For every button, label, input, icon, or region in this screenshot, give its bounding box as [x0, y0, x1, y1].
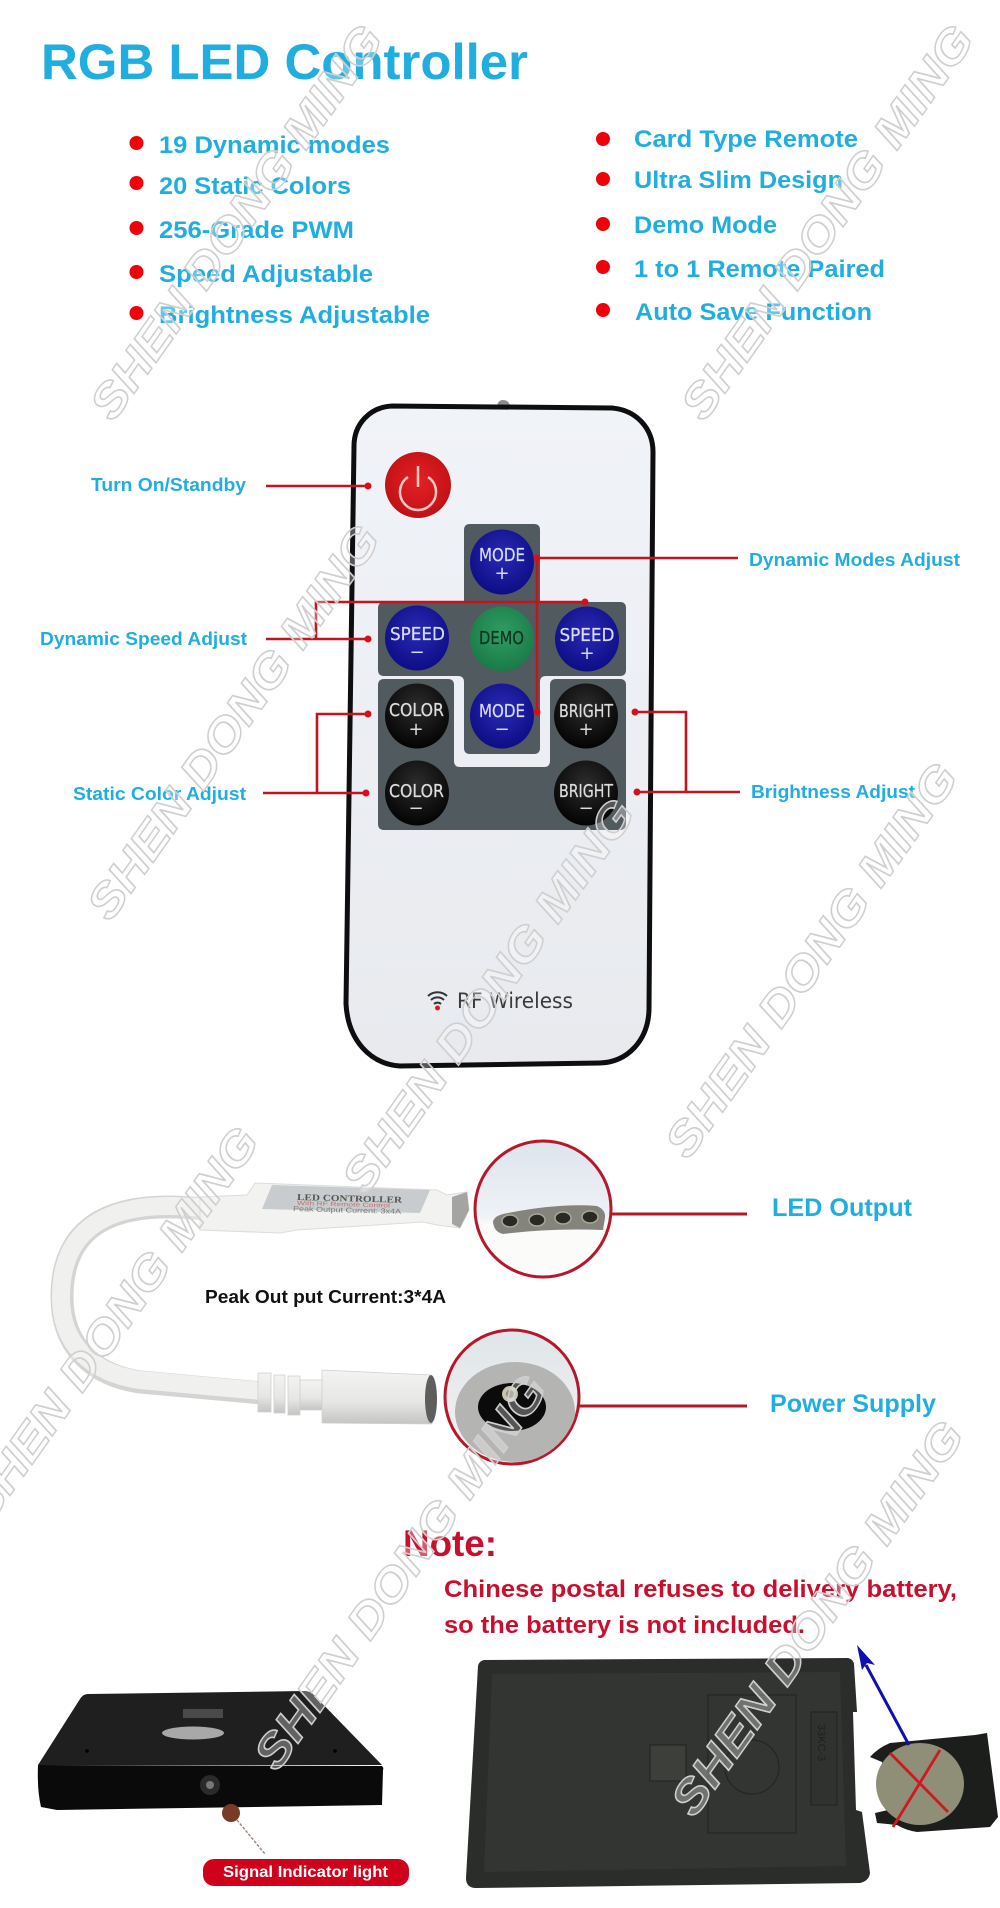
button: DEMO: [470, 606, 534, 672]
button: MODE -: MODE: [479, 701, 525, 722]
button: COLOR +: [385, 684, 449, 748]
peak current note: Peak Out put Current:3*4A: [205, 1287, 446, 1307]
indicator LED: [200, 1775, 220, 1795]
button: MODE +: MODE: [479, 545, 525, 566]
red cross: [890, 1750, 948, 1827]
callout: Static Color Adjust: Static Color Adjust: [73, 784, 246, 804]
bullet: 19 Dynamic modes: 19 Dynamic modes: [159, 132, 390, 159]
button: SPEED -: [385, 606, 449, 670]
pointer line: [237, 1820, 265, 1854]
feature list: left column: [130, 132, 430, 329]
button: BRIGHT -: [554, 760, 618, 826]
note text: Chinese postal refuses to delivery battery,: [444, 1576, 957, 1603]
feature list: right column: [596, 126, 885, 326]
module label: LED CONTROLLER: [297, 1192, 403, 1205]
callout: Dynamic Speed Adjust: [40, 598, 588, 649]
watermark: SHEN DONG MING: [660, 1411, 974, 1825]
button: BRIGHT +: [554, 684, 618, 748]
keypad: lower U: [378, 679, 626, 830]
watermark: SHEN DONG MING: [670, 15, 984, 429]
callout: LED Output: LED Output: [772, 1194, 913, 1222]
button: COLOR +: +: [408, 719, 424, 740]
zoom circle: power jack: [445, 1330, 579, 1464]
bullet: Auto Save Function: Auto Save Function: [635, 299, 872, 326]
note text: so the battery is not included.: [444, 1612, 805, 1639]
battery: [876, 1743, 964, 1825]
RF Wireless text: RF Wireless: [457, 989, 573, 1013]
callout: Turn On/Standby: [91, 475, 372, 495]
keypad: upper cross: [378, 524, 626, 754]
connector tip: [452, 1192, 469, 1228]
bullet: Brightness Adjustable: Brightness Adjustable: [159, 302, 430, 329]
button: BRIGHT -: −: [578, 798, 594, 819]
callout: Brightness Adjust: Brightness Adjust: [751, 782, 915, 802]
bullet: Speed Adjustable: Speed Adjustable: [159, 261, 373, 288]
blue arrow: [857, 1645, 909, 1745]
DC jack opening: [425, 1375, 437, 1423]
slot: [183, 1709, 223, 1718]
bullet: 256-Grade PWM: 256-Grade PWM: [159, 217, 354, 244]
button: MODE +: +: [494, 563, 510, 584]
bullet: 1 to 1 Remote Paired: 1 to 1 Remote Paired: [634, 256, 885, 283]
button: COLOR -: COLOR: [389, 781, 444, 802]
module label: [262, 1185, 430, 1216]
label: Signal Indicator light: Signal Indicator light: [223, 1864, 389, 1881]
embossed markings: [650, 1695, 837, 1833]
DC jack ribs: [258, 1373, 324, 1415]
button: SPEED +: [555, 606, 619, 672]
button: BRIGHT -: BRIGHT: [559, 781, 614, 802]
button: COLOR -: [385, 760, 449, 826]
bullet: Ultra Slim Design: Ultra Slim Design: [634, 167, 843, 194]
device top face: [38, 1691, 382, 1765]
button: COLOR +: COLOR: [389, 700, 444, 721]
holder: [870, 1733, 998, 1832]
logo: [162, 1726, 224, 1740]
title: RGB LED Controller: [41, 34, 528, 90]
button: SPEED +: SPEED: [560, 625, 614, 646]
device front face: [38, 1765, 383, 1810]
button: MODE -: [470, 684, 534, 748]
callout: Brightness Adjust: [632, 708, 915, 802]
bullet: Demo Mode: Demo Mode: [634, 212, 777, 239]
marking text: 33KC-3: [815, 1724, 827, 1761]
button: BRIGHT +: +: [578, 719, 594, 740]
callout: Static Color Adjust: [73, 710, 372, 804]
button: COLOR -: −: [408, 798, 424, 819]
module label: With RF Remote Control: [297, 1201, 390, 1209]
zoom circle: output connector: [475, 1141, 611, 1277]
cable: [61, 1206, 262, 1393]
remote control illustration: [346, 400, 653, 1066]
button: BRIGHT +: BRIGHT: [559, 701, 614, 722]
remote body: [346, 406, 653, 1066]
back cover: [466, 1658, 870, 1888]
callout: Turn On/Standby: Turn On/Standby: [91, 475, 246, 495]
antenna nub: [497, 400, 510, 406]
watermark: SHEN DONG MING: [79, 15, 393, 429]
module label: Peak Output Current: 3x4A: [293, 1206, 402, 1216]
button: SPEED +: +: [579, 643, 595, 664]
note text: [444, 1576, 957, 1639]
watermark: SHEN DONG MING: [654, 753, 968, 1167]
pointer dot: [222, 1804, 240, 1822]
callout: Dynamic Modes Adjust: [534, 550, 960, 716]
remote back with battery: [466, 1645, 998, 1888]
callout: Dynamic Modes Adjust: Dynamic Modes Adjust: [749, 550, 960, 570]
watermark: SHEN DONG MING: [331, 789, 645, 1203]
watermark: SHEN DONG MING: [243, 1365, 557, 1779]
controller with cable: [61, 1183, 469, 1424]
callout: Power Supply: [445, 1330, 936, 1464]
watermark: SHEN DONG MING: [76, 515, 390, 929]
screw dots: [85, 1749, 337, 1753]
bullet: 20 Static Colors: 20 Static Colors: [159, 173, 351, 200]
callout: Power Supply: Power Supply: [770, 1390, 936, 1418]
DC jack body: [322, 1370, 434, 1424]
icon: wifi: [428, 992, 447, 1010]
device front view with indicator light: [38, 1691, 409, 1886]
button: MODE -: −: [494, 719, 510, 740]
callout: Dynamic Speed Adjust: Dynamic Speed Adjust: [40, 629, 247, 649]
label: Signal Indicator light: [203, 1859, 409, 1886]
bullet: Card Type Remote: Card Type Remote: [634, 126, 858, 153]
controller module body: [200, 1183, 469, 1233]
button: SPEED -: SPEED: [390, 624, 445, 645]
button: SPEED -: −: [409, 642, 425, 663]
power button: [385, 452, 451, 518]
button: MODE +: [470, 530, 534, 594]
back cover inner panel: [484, 1672, 846, 1872]
note heading: Note:: [403, 1523, 497, 1564]
button: DEMO: DEMO: [479, 628, 524, 649]
callout: LED Output: [475, 1141, 913, 1277]
